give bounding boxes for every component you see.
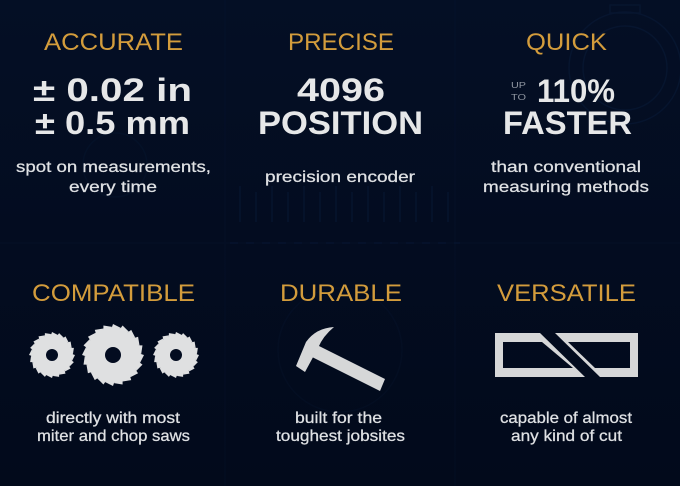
stat: positions — [258, 72, 423, 141]
heading: precise: PRECISE — [288, 29, 394, 56]
caption: quick — [483, 159, 649, 196]
icon: saw blades — [28, 323, 200, 387]
caption: durable — [276, 410, 405, 445]
stat: speed: TO — [511, 93, 526, 102]
heading: accurate: ACCURATE — [44, 29, 183, 56]
panel: precise — [258, 29, 423, 186]
stat: tolerance — [33, 72, 192, 141]
stat: speed — [503, 73, 632, 141]
panel: durable — [276, 280, 405, 445]
heading: durable: DURABLE — [280, 280, 402, 307]
stat: positions: 4096 — [297, 72, 385, 108]
caption: versatile: capable of almost — [500, 410, 633, 427]
caption: quick: than conventional — [491, 159, 641, 176]
caption: quick: measuring methods — [483, 179, 649, 196]
panel: quick — [483, 29, 649, 196]
caption: accurate: spot on measurements, — [16, 159, 211, 176]
heading: versatile: VERSATILE — [497, 280, 636, 307]
panel: accurate — [16, 29, 211, 196]
caption: durable: built for the — [295, 410, 382, 427]
stat: positions: POSITION — [258, 105, 423, 141]
heading: compatible: COMPATIBLE — [32, 280, 195, 307]
caption: compatible: miter and chop saws — [37, 428, 190, 445]
stat: speed: FASTER — [503, 105, 632, 141]
caption: compatible: directly with most — [46, 410, 181, 427]
icon: hammer — [296, 327, 385, 391]
heading: quick: QUICK — [526, 29, 607, 56]
caption: durable: toughest jobsites — [276, 428, 405, 445]
caption: compatible — [37, 410, 190, 445]
caption: accurate — [16, 159, 211, 196]
stat: speed: UP — [511, 81, 526, 90]
caption: precise: precision encoder — [265, 169, 416, 186]
stat: speed: 110% — [537, 73, 615, 109]
caption: accurate: every time — [69, 179, 157, 196]
stat: tolerance: ± 0.5 mm — [35, 105, 190, 141]
caption: versatile — [500, 410, 633, 445]
icon: angled cut frames — [495, 333, 638, 377]
caption: versatile: any kind of cut — [511, 428, 623, 445]
panel: compatible — [28, 280, 200, 445]
stat: tolerance: ± 0.02 in — [33, 72, 192, 108]
panel: versatile — [495, 280, 638, 445]
